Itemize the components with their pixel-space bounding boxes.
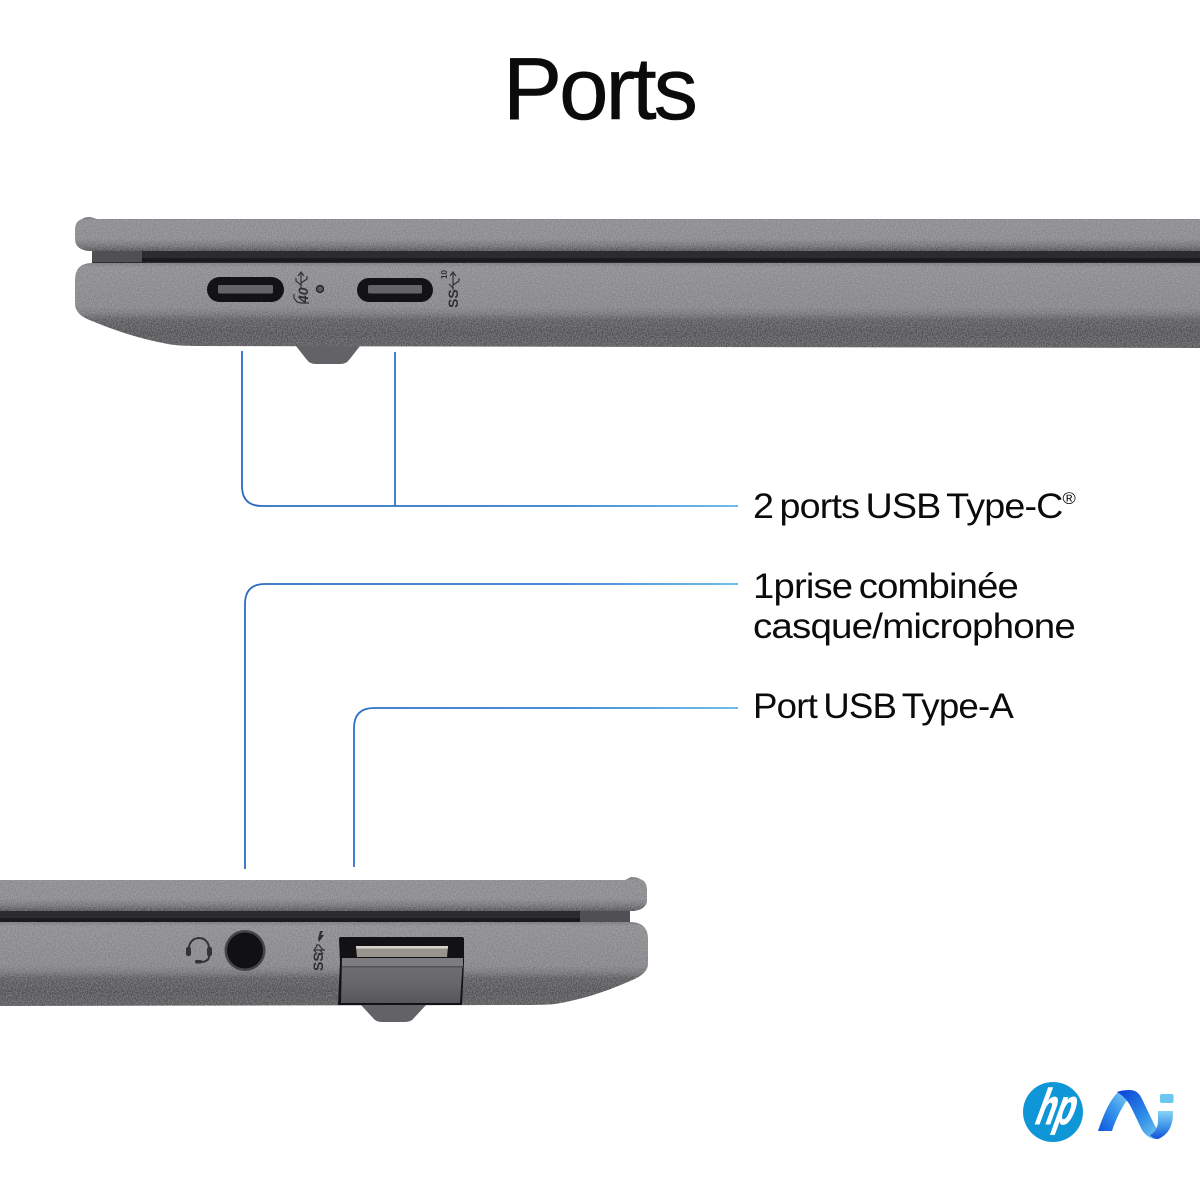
headset icon [186, 938, 212, 964]
hinge gap: bottom view [0, 910, 630, 924]
logo: HP: hp [1029, 1078, 1088, 1135]
label: USB Type-C: ® [1063, 489, 1076, 508]
USB-C port 1 [207, 277, 284, 302]
leader line: USB Type-A [354, 708, 738, 867]
headphone jack [224, 930, 266, 971]
USB Type-A port [338, 937, 464, 1005]
title: Ports [503, 39, 695, 138]
hinge gap: top view [92, 250, 1200, 264]
USB-C port 2 [357, 278, 433, 302]
label: headset jack [753, 566, 1075, 646]
laptop foot: bottom view [361, 1005, 426, 1022]
leader line: USB Type-C ports [242, 351, 738, 506]
leader line: headset jack [245, 584, 738, 869]
base: top view [75, 263, 1200, 348]
label: headset jack: 1 prise combinée [753, 566, 1018, 606]
USB4 40 Gbps marking [294, 272, 311, 304]
base: bottom view [0, 922, 648, 1006]
laptop: bottom side view with jack and USB-A [0, 877, 648, 1022]
label: headset jack: casque/microphone [753, 606, 1075, 646]
logo: AI ribbon [1098, 1090, 1174, 1139]
status LED [316, 286, 324, 292]
laptop: top side view with USB-C ports [75, 217, 1200, 364]
label: USB Type-A: Port USB Type-A [753, 686, 1014, 726]
USB SS marking with charge bolt: SS [310, 952, 326, 971]
label: USB Type-C: 2 ports USB Type-C [753, 486, 1045, 526]
USB SS marking with charge bolt [310, 931, 326, 971]
USB SS 10 marking: 10 [440, 270, 449, 279]
lid: top view [75, 217, 1200, 251]
USB SS 10 marking [440, 270, 461, 308]
logo: HP [1023, 1078, 1088, 1142]
lid: bottom view [0, 877, 647, 911]
laptop foot: top view [296, 346, 360, 364]
USB SS 10 marking: SS [445, 289, 461, 308]
USB4 40 Gbps marking: 40 [295, 287, 311, 304]
